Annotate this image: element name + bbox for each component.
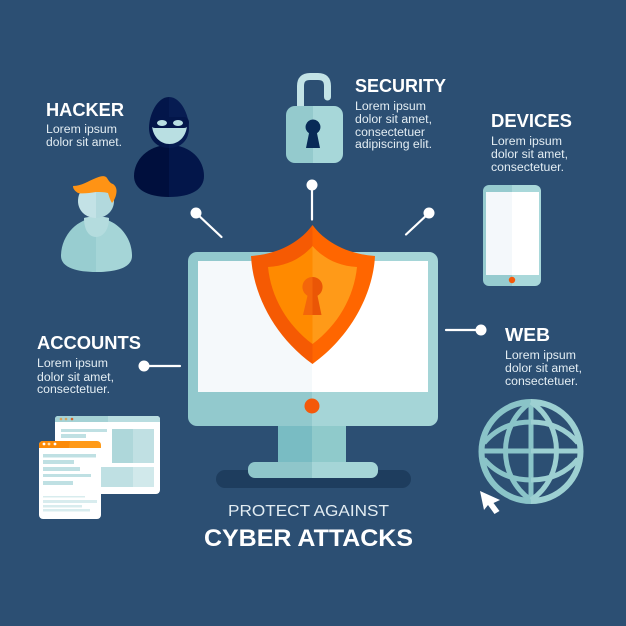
monitor screen	[198, 261, 428, 392]
accounts windows icon	[39, 416, 160, 519]
shield	[251, 225, 375, 364]
heading: hacker: HACKER	[46, 100, 124, 120]
text: devices body: Lorem ipsum	[491, 136, 562, 148]
text: web body: dolor sit amet,	[505, 363, 582, 375]
text: security body: dolor sit amet,	[355, 114, 432, 126]
padlock keyhole	[306, 120, 320, 148]
connector: security	[306, 180, 318, 220]
hacker mask	[150, 117, 189, 128]
hacker face	[152, 124, 187, 144]
monitor body	[188, 252, 438, 426]
text: security body: Lorem ipsum	[355, 101, 426, 113]
text: accounts body: Lorem ipsum	[37, 358, 108, 370]
text: devices body: consectetuer.	[491, 162, 564, 174]
keyhole	[302, 277, 323, 315]
text: hacker body: Lorem ipsum	[46, 124, 117, 136]
monitor base shadow	[216, 470, 411, 488]
text: accounts body: dolor sit amet,	[37, 372, 114, 384]
text: web body: consectetuer.	[505, 376, 578, 388]
monitor foot	[248, 462, 378, 478]
user hair	[73, 176, 117, 203]
title line 2: CYBER ATTACKS	[204, 525, 413, 552]
globe icon	[482, 402, 580, 501]
padlock icon	[286, 76, 343, 163]
text: accounts body: consectetuer.	[37, 384, 110, 396]
heading: web: WEB	[505, 325, 550, 345]
cursor icon	[480, 491, 500, 514]
text: devices body: dolor sit amet,	[491, 149, 568, 161]
text: web body: Lorem ipsum	[505, 350, 576, 362]
text: devices body	[491, 136, 568, 174]
user icon	[61, 176, 132, 272]
monitor	[188, 252, 438, 488]
phone icon	[483, 185, 541, 286]
heading: accounts: ACCOUNTS	[37, 333, 141, 353]
connector: web	[446, 324, 486, 336]
text: accounts body	[37, 358, 114, 396]
connector: devices	[406, 208, 434, 234]
heading: security: SECURITY	[355, 76, 446, 96]
phone button	[509, 277, 515, 283]
text: security body	[355, 101, 432, 151]
text: web body	[505, 350, 582, 388]
front window	[39, 441, 101, 519]
connector: hacker	[190, 208, 222, 237]
monitor stand	[278, 426, 346, 464]
connector: accounts	[138, 360, 180, 372]
back window	[55, 416, 160, 494]
text: hacker body: dolor sit amet.	[46, 137, 122, 149]
text: security body: adipiscing elit.	[355, 139, 432, 151]
text: security body: consectetuer	[355, 127, 425, 139]
hacker icon	[134, 97, 204, 197]
heading: devices: DEVICES	[491, 111, 572, 131]
title line 1: PROTECT AGAINST	[228, 503, 389, 520]
power button	[304, 398, 320, 414]
text: hacker body	[46, 124, 122, 149]
